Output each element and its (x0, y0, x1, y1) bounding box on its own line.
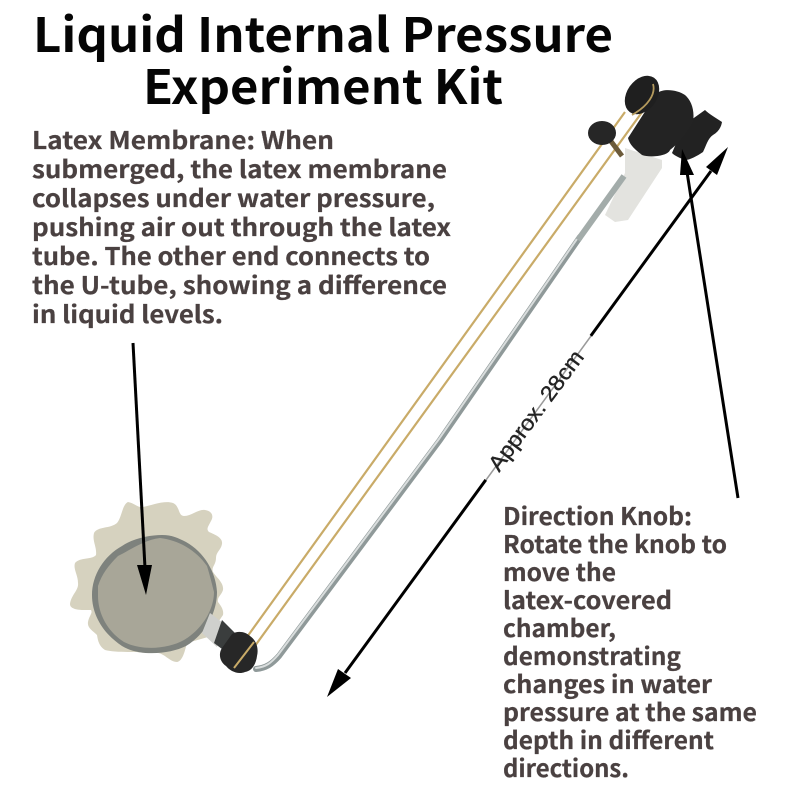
text block: direction knob: depth in different (503, 721, 714, 756)
gold wires (247, 97, 653, 650)
arrow: latex membrane (133, 343, 152, 595)
text block: direction knob: chamber, (503, 609, 616, 644)
top knob (618, 69, 666, 121)
dimension label: Approx. 28cm (483, 345, 589, 476)
text block: latex membrane: tube. The other end connects to (32, 237, 430, 272)
text block: latex membrane: in liquid levels. (32, 295, 223, 330)
text block: direction knob: latex-covered (503, 581, 672, 616)
rod over plate (578, 176, 624, 240)
latex skirt (70, 502, 223, 662)
top assembly: knobs (588, 69, 722, 160)
direction knob (672, 110, 722, 160)
text block: direction knob: Direction Knob: (503, 497, 692, 532)
text block: latex membrane (32, 121, 452, 330)
text block: direction knob: directions. (503, 749, 629, 784)
band (632, 84, 654, 115)
dimension arrow (327, 147, 728, 697)
membrane disc (98, 538, 214, 648)
arrow: direction knob (680, 149, 738, 498)
white plate (605, 148, 662, 222)
text block: direction knob: Rotate the knob to (503, 525, 727, 560)
text block: direction knob: changes in water (503, 665, 713, 700)
title (33, 0, 613, 118)
main body (628, 90, 694, 156)
text block: latex membrane: Latex Membrane: When (32, 121, 334, 156)
text block: direction knob: demonstrating (503, 637, 681, 672)
text block: direction knob: pressure at the same (503, 693, 757, 728)
metal rod (256, 236, 580, 669)
text block: latex membrane: pushing air out through the latex (32, 208, 452, 243)
screw (610, 140, 622, 156)
small knob (588, 121, 616, 145)
text block: latex membrane: submerged, the latex membrane (32, 150, 447, 185)
text block: latex membrane: the U-tube, showing a difference (32, 266, 447, 301)
membrane ring (92, 535, 217, 653)
latex membrane chamber (70, 502, 223, 662)
text block: direction knob: move the (503, 553, 616, 588)
lower connector knob (202, 613, 258, 673)
text block: direction knob (503, 497, 757, 784)
text block: latex membrane: collapses under water pressure, (32, 179, 435, 214)
title: Experiment Kit (143, 49, 503, 118)
